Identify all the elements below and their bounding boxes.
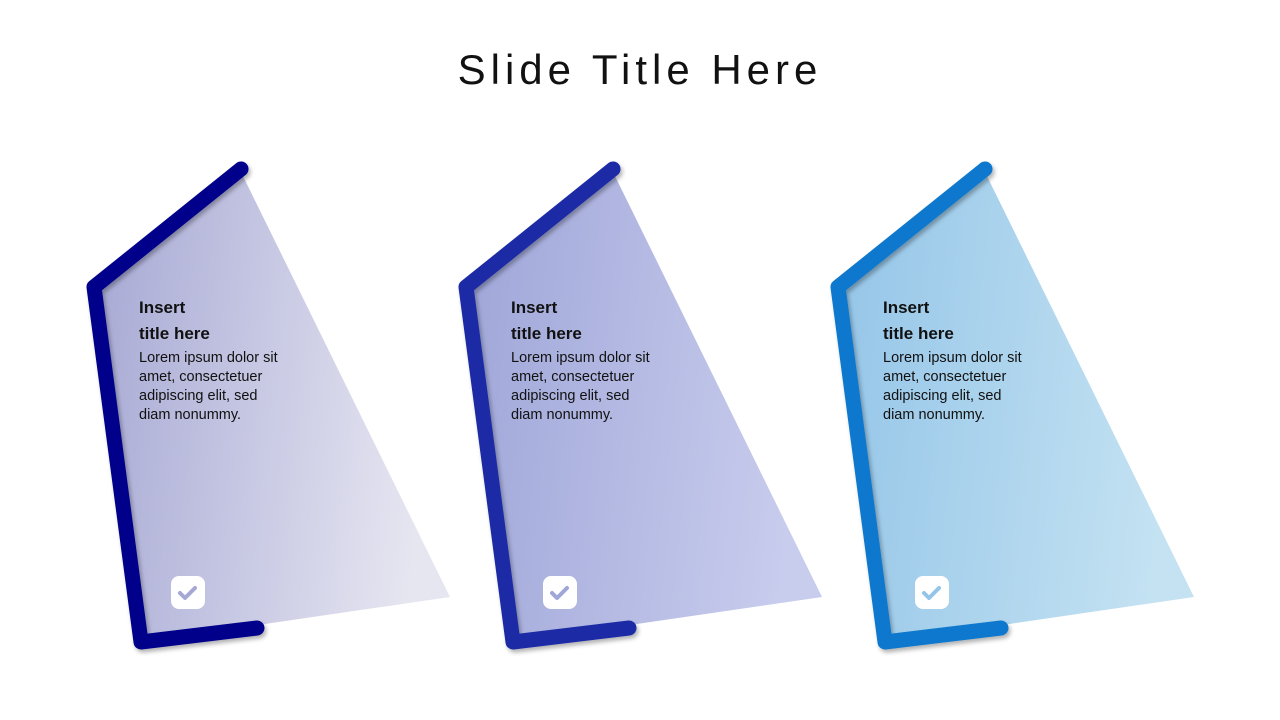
text block 1: amet, consectetuer bbox=[139, 369, 262, 385]
text block 2: amet, consectetuer bbox=[511, 369, 634, 385]
text block 1: diam nonummy. bbox=[139, 407, 241, 423]
text block 2: diam nonummy. bbox=[511, 407, 613, 423]
text block 2: adipiscing elit, sed bbox=[511, 388, 630, 404]
text block 3 bbox=[883, 298, 1022, 423]
text block 1 bbox=[139, 298, 278, 423]
text block 2: title here bbox=[511, 324, 582, 343]
text block 1: title here bbox=[139, 324, 210, 343]
title: Slide Title Here bbox=[458, 46, 822, 93]
icon: check bbox=[915, 576, 949, 609]
text block 3: amet, consectetuer bbox=[883, 369, 1006, 385]
text block 2 bbox=[511, 298, 650, 423]
text block 2: Lorem ipsum dolor sit bbox=[511, 350, 650, 366]
panel 2 bbox=[466, 169, 822, 642]
text block 3: Lorem ipsum dolor sit bbox=[883, 350, 1022, 366]
text block 3: Insert bbox=[883, 298, 929, 317]
panel 3 bbox=[838, 169, 1194, 642]
text block 3: adipiscing elit, sed bbox=[883, 388, 1002, 404]
text block 2: Insert bbox=[511, 298, 557, 317]
text block 3: title here bbox=[883, 324, 954, 343]
text block 1: Insert bbox=[139, 298, 185, 317]
icon: check bbox=[543, 576, 577, 609]
text block 3: diam nonummy. bbox=[883, 407, 985, 423]
icon: check bbox=[171, 576, 205, 609]
text block 1: Lorem ipsum dolor sit bbox=[139, 350, 278, 366]
panel 1 bbox=[94, 169, 450, 642]
text block 1: adipiscing elit, sed bbox=[139, 388, 258, 404]
